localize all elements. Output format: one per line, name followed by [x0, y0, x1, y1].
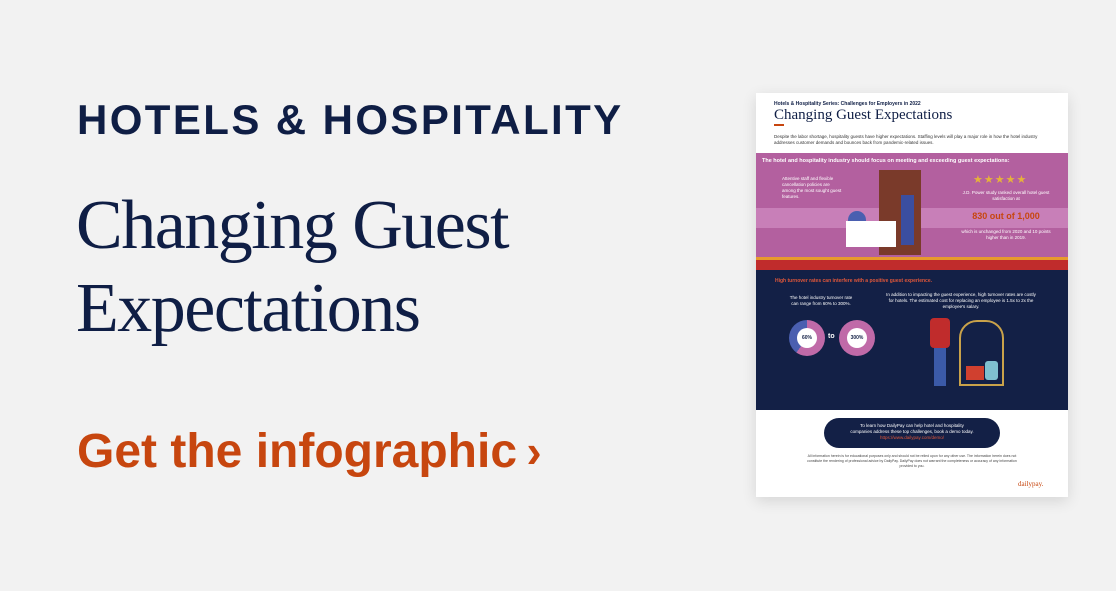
panel: navy turnover: High turnover rates can interfere with a positive guest experience. [775, 278, 932, 284]
disclaimer: All information herein is for educational purposes only and should not be relied upon for any other use. The information herein does not constitute the rendering of professional advice by DailyPay. DailyPay does not warrant the completeness or accuracy of any information provided to you. [807, 454, 1017, 468]
card header: Despite the labor shortage, hospitality guests have higher expectations. Staffing levels will play a major role in how the hotel industry addresses customer demands and bounces back from pandemic-related issues. [774, 134, 1037, 145]
infographic preview card [756, 93, 1068, 497]
CTA pill: To learn how DailyPay can help hotel and hospitality [860, 423, 964, 428]
title: Changing Guest [76, 187, 508, 264]
illustration: bellhop and cart [930, 318, 950, 348]
title: Expectations [76, 270, 420, 347]
stars: ★★★★★ [973, 174, 1027, 186]
call to action link: Get the infographic › [77, 425, 542, 478]
donut charts: 60% [802, 335, 812, 341]
CTA pill: companies address these top challenges, book a demo today. [850, 429, 974, 434]
panel: navy turnover [756, 270, 1068, 410]
card header [774, 101, 1038, 145]
title [76, 187, 510, 347]
panel: navy turnover: 300% [851, 335, 863, 341]
illustration: door and bellhop [879, 170, 921, 255]
eyebrow heading: HOTELS & HOSPITALITY [77, 96, 624, 143]
panel: pink guest expectations: J.D. Power study ranked overall hotel guest satisfaction at [963, 190, 1049, 201]
CTA pill [824, 418, 1000, 448]
card header: Hotels & Hospitality Series: Challenges for Employers in 2022 [774, 101, 921, 107]
panel: pink guest expectations: Attentive staff and flexible cancellation policies are among the most sought guest features. [782, 176, 841, 199]
logo: dailypay. [1018, 480, 1043, 488]
stat: 830 out of 1,000 [972, 211, 1040, 221]
panel: pink guest expectations [756, 153, 1068, 257]
CTA pill: https://www.dailypay.com/demo/ [880, 435, 944, 440]
panel: navy turnover: In addition to impacting the guest experience, high turnover rates are costly for hotels. The estimated cost for replacing an employee is 1.5x to 2x the employee's salary. [886, 292, 1036, 309]
panel: navy turnover: The hotel industry turnover rate can range from 60% to 300%. [790, 295, 852, 306]
card header: Changing Guest Expectations [774, 107, 952, 123]
panel: navy turnover: to [828, 333, 835, 340]
panel: pink guest expectations: The hotel and hospitality industry should focus on meeting and exceeding guest expectations: [762, 158, 1010, 164]
panel: pink guest expectations: which is unchanged from 2020 and 10 points higher than in 2019. [961, 229, 1051, 240]
donut charts [789, 320, 825, 356]
